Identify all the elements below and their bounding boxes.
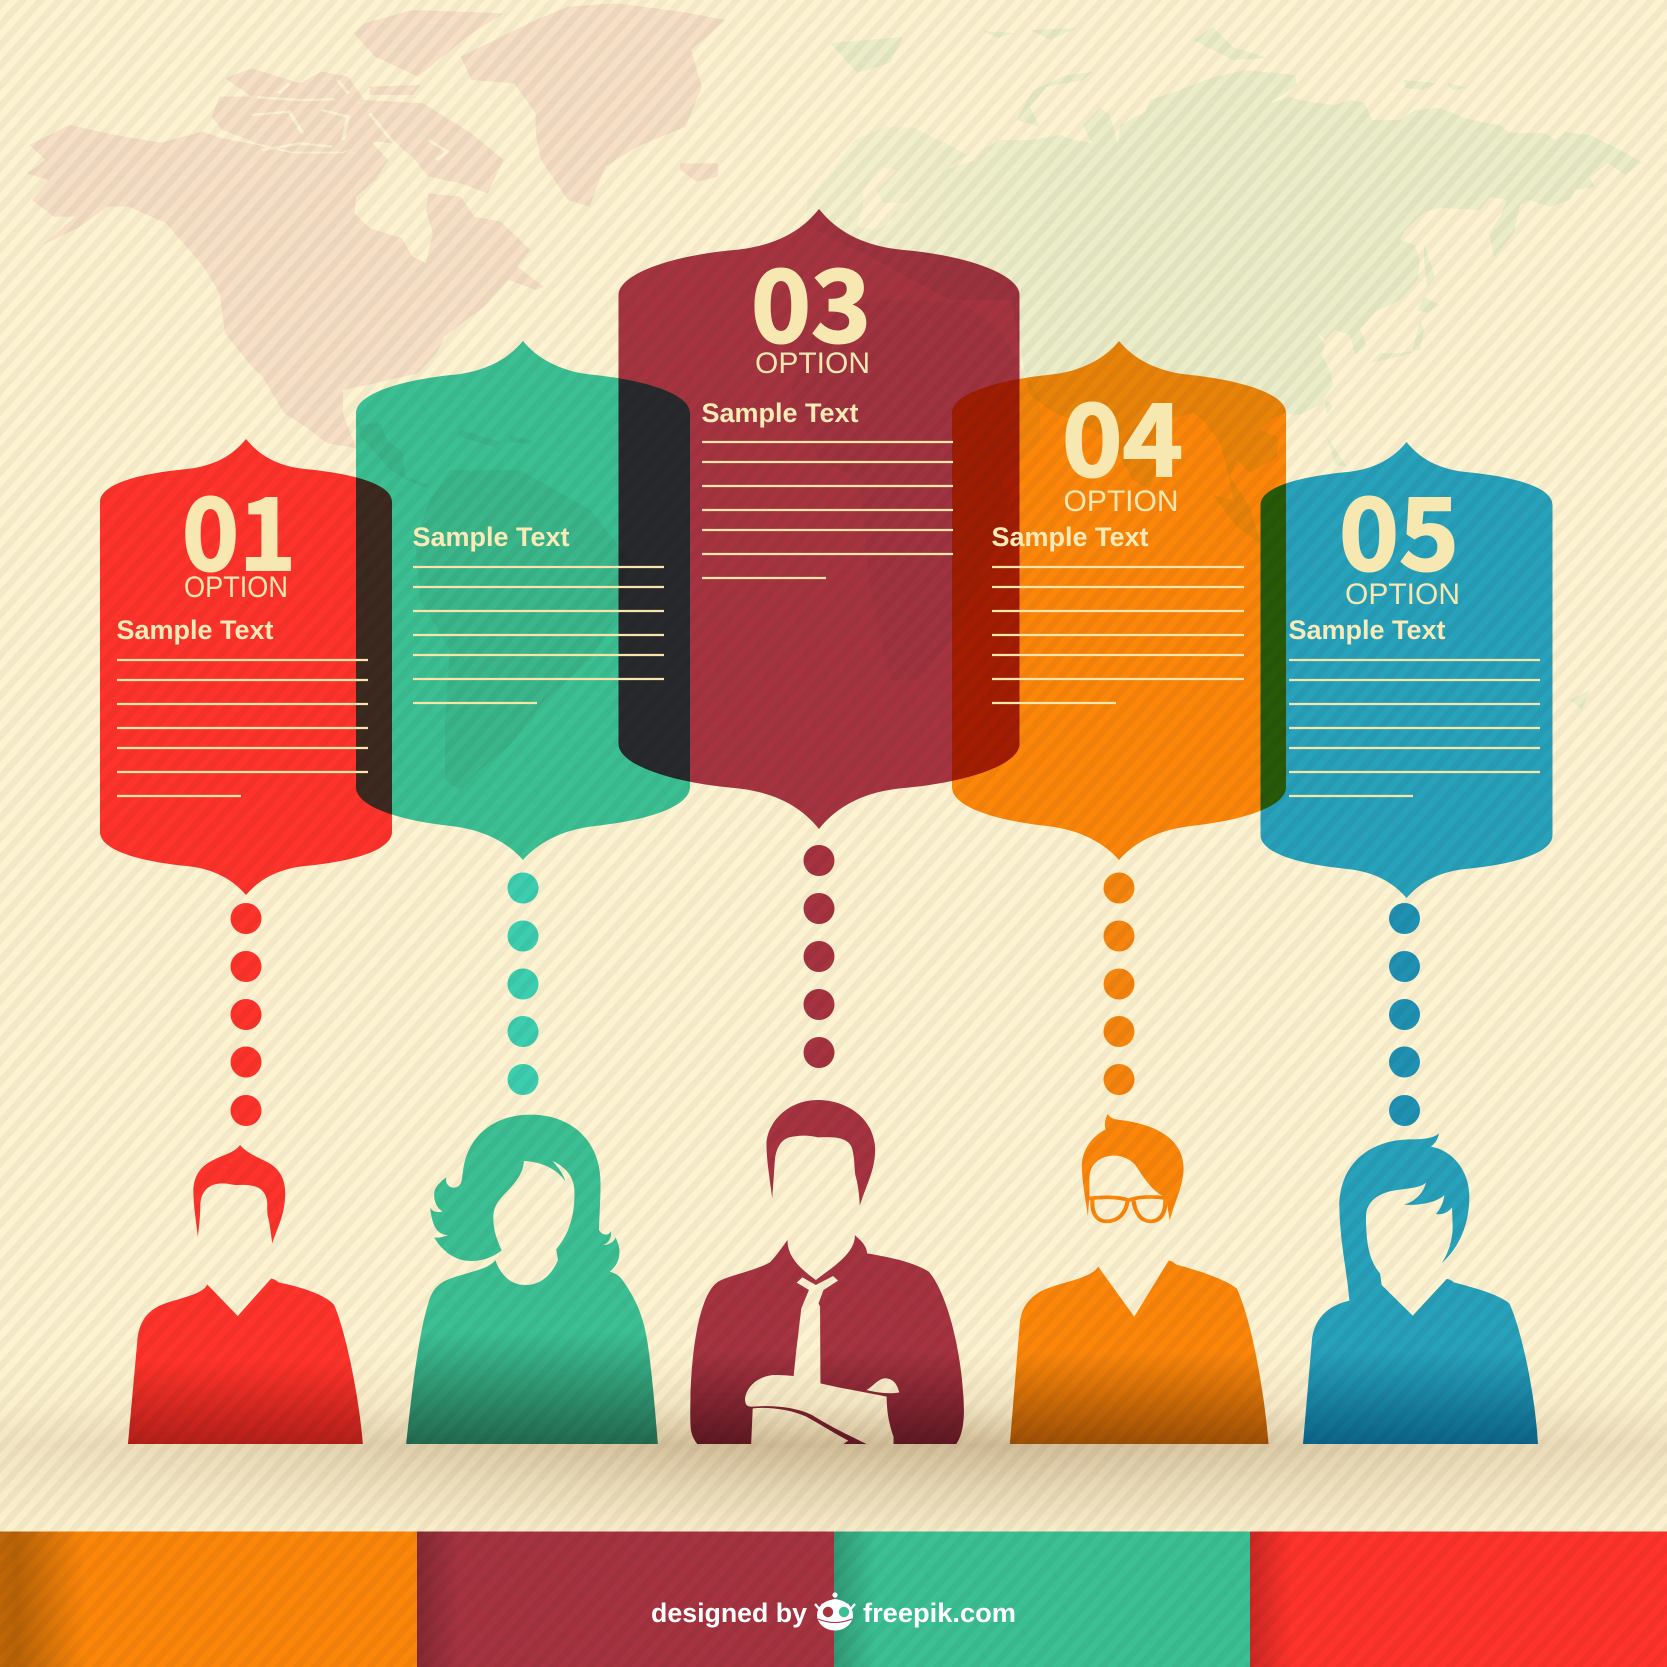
- panel text: 03: Sample Text: [702, 398, 859, 428]
- panel shape: 02 green: [356, 341, 690, 860]
- dots: green connector: [508, 872, 538, 1095]
- footer colour bar: [0, 1532, 1667, 1667]
- panel text: 05: Sample Text: [1288, 615, 1446, 645]
- footer band: green: [834, 1532, 1250, 1667]
- panel text: 01: [116, 454, 368, 796]
- dots: orange connector: [1104, 872, 1134, 1095]
- map: Africa: [790, 300, 1040, 680]
- panel shape: 03 maroon: [618, 209, 1020, 829]
- footer credit: freepik.com: [863, 1598, 1016, 1628]
- panel text: 01: 01: [182, 454, 296, 599]
- floor shadow: [0, 1377, 1667, 1531]
- panel text: 04: [992, 360, 1244, 703]
- panel text: 04: Sample Text: [992, 522, 1149, 552]
- icon: freepik robot logo: [815, 1592, 855, 1630]
- panel text: 02: [412, 522, 664, 703]
- panel text: 03: [702, 226, 953, 578]
- map: arctic islands, Japan, Australasia: [830, 27, 1590, 710]
- panel text: 01: Sample Text: [116, 615, 274, 645]
- person 5: blue woman: [1303, 1133, 1538, 1444]
- panel text: 02: Sample Text: [412, 522, 570, 552]
- panel text: 04: OPTION: [1064, 485, 1178, 518]
- person 2: green woman: [406, 1115, 658, 1444]
- footer band: red: [1250, 1532, 1667, 1667]
- person 3: maroon businessman: [690, 1100, 964, 1444]
- panel text: 04: 04: [1062, 360, 1183, 505]
- panel text: 03: OPTION: [755, 347, 870, 380]
- dots: red connector: [230, 903, 262, 1126]
- map: Central and South America: [358, 423, 630, 790]
- map: Eurasia: [807, 70, 1642, 543]
- panel text: 05: OPTION: [1345, 578, 1460, 611]
- panel shape: 04 orange: [952, 341, 1286, 860]
- dots: blue connector: [1389, 903, 1420, 1126]
- panel text: 05: 05: [1339, 454, 1459, 599]
- panel text: 05: [1288, 454, 1540, 796]
- person 4: orange man with glasses: [1010, 1114, 1269, 1444]
- panel text: 03: 03: [751, 226, 871, 371]
- panel text: 01: OPTION: [184, 571, 288, 604]
- world map: [27, 3, 1642, 790]
- footer credit: designed by: [651, 1598, 807, 1628]
- person 1: red man: [128, 1145, 363, 1444]
- panel shape: 01 red: [100, 439, 392, 895]
- panel shape: 05 blue: [1260, 442, 1552, 898]
- footer band: maroon: [417, 1532, 834, 1667]
- map: North America and Greenland: [27, 3, 726, 448]
- footer band: orange: [0, 1532, 417, 1667]
- dots: maroon connector: [804, 845, 834, 1068]
- footer credit: [651, 1592, 1016, 1630]
